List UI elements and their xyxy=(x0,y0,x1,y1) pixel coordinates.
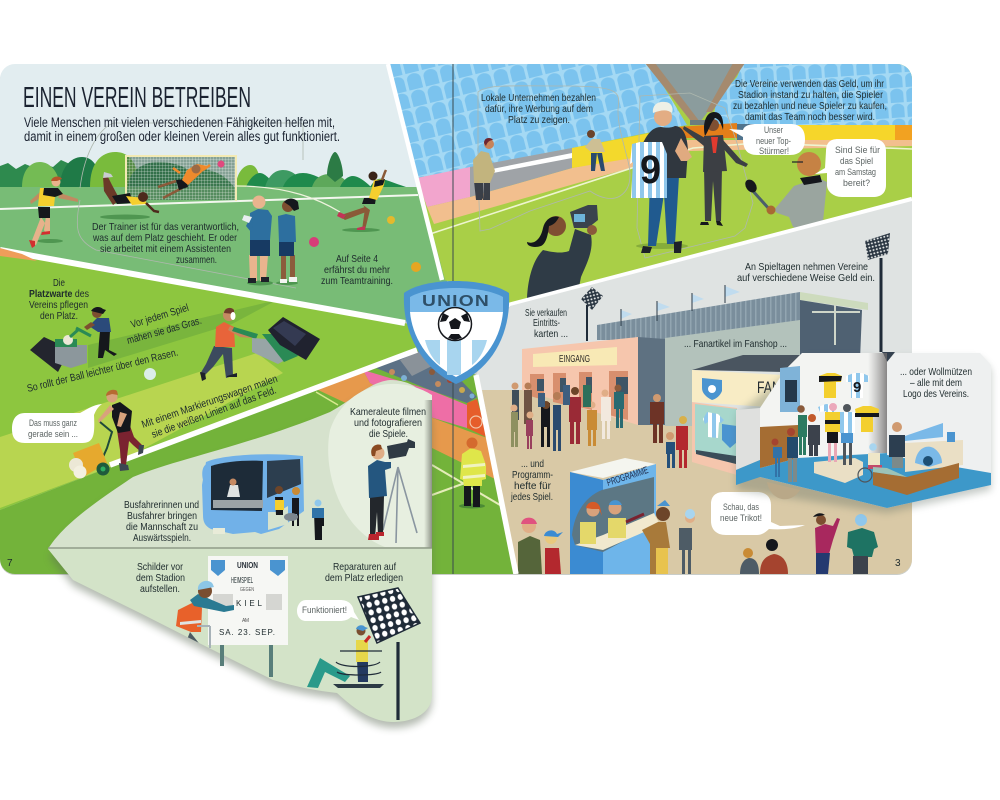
shirts on display xyxy=(818,373,879,432)
beanies text: – alle mit dem xyxy=(910,377,962,389)
fans at kiosk xyxy=(518,500,695,574)
sponsors text: dafür, ihre Werbung auf dem xyxy=(485,103,593,115)
trainer text: Der Trainer ist für das verantwortlich, xyxy=(92,221,239,233)
groundskeepers text xyxy=(29,277,89,322)
interviewer xyxy=(743,152,827,232)
sponsors text xyxy=(481,92,596,126)
income text: An Spieltagen nehmen Vereine xyxy=(745,261,868,273)
match sign: AM xyxy=(242,618,249,624)
fans near the pop-out xyxy=(740,513,878,574)
programme text: Programm- xyxy=(512,469,553,481)
speech bubble: new shirt xyxy=(711,492,805,535)
club crest: UNION xyxy=(422,293,490,310)
marking text: Mit einem Markierungswagen malen xyxy=(140,373,279,431)
bus text: Busfahrerinnen und xyxy=(124,499,199,511)
groundskeepers text: den Platz. xyxy=(40,310,78,322)
track xyxy=(427,140,912,224)
shop floor xyxy=(736,453,991,508)
speech bubble: ready for Saturday: bereit? xyxy=(843,178,870,189)
speech bubble: top striker: neuer Top- xyxy=(756,136,791,147)
match sign xyxy=(208,556,288,677)
tickets text: Sie verkaufen xyxy=(525,307,567,319)
bus text: die Mannschaft zu xyxy=(126,521,198,533)
flap: backstage jobs xyxy=(48,380,432,728)
mannequins and plinth xyxy=(814,403,863,483)
poster xyxy=(780,366,800,412)
trainer text: zusammen. xyxy=(176,254,217,266)
bus text: Busfahrer bringen xyxy=(127,510,197,522)
board worker left xyxy=(473,138,495,200)
fan shop building xyxy=(692,355,800,475)
footballer with new shirt: 9 xyxy=(640,148,661,192)
player kicking xyxy=(309,170,421,272)
vendor right xyxy=(608,500,644,538)
trees behind the pitch xyxy=(0,152,406,187)
intro text: damit in einem großen oder kleinen Verein alles gut funktioniert. xyxy=(24,129,340,144)
floodlight repair xyxy=(307,588,420,720)
panel: match-day income xyxy=(476,201,912,574)
groundskeepers text: Die xyxy=(53,277,65,289)
intro text: Viele Menschen mit vielen verschiedenen Fähigkeiten helfen mit, xyxy=(24,115,335,130)
programme kiosk xyxy=(570,458,660,574)
presenter xyxy=(683,112,748,226)
repairs text: Reparaturen auf xyxy=(333,561,396,573)
vendor left xyxy=(580,502,602,544)
fan shop building: FANS xyxy=(757,378,789,397)
speech bubble: top striker: Stürmer! xyxy=(759,146,789,157)
clubs spend text: Stadion instand zu halten, die Spieler xyxy=(738,89,883,101)
wall text fanshop: ... Fanartikel im Fanshop ... xyxy=(684,338,787,350)
pop-out: fan shop interior xyxy=(736,352,991,513)
floodlight right xyxy=(865,233,890,352)
speech bubble: new shirt: neue Trikot! xyxy=(720,513,762,524)
mowing text xyxy=(26,302,203,395)
family at fan shop xyxy=(666,416,688,468)
mowing text: So rollt der Ball leichter über den Rasen. xyxy=(26,347,179,395)
die-cut outline player xyxy=(637,93,753,258)
floodlight near entrance xyxy=(581,287,603,341)
wheelchair visitor xyxy=(858,443,882,482)
beanies text: ... oder Wollmützen xyxy=(900,366,972,378)
speech bubble: gerade: gerade sein ... xyxy=(28,429,78,440)
repairs text: dem Platz erledigen xyxy=(325,572,403,584)
cameraman with tripod xyxy=(368,439,417,543)
page number right: 3 xyxy=(895,558,901,569)
coach with clipboard xyxy=(242,196,273,286)
teamtraining note: zum Teamtraining. xyxy=(321,275,393,287)
sponsors text: Lokale Unternehmen bezahlen xyxy=(481,92,596,104)
programme text xyxy=(510,458,553,503)
groundskeepers text: Vereins pflegen xyxy=(29,299,88,311)
boarding players xyxy=(275,486,324,540)
panel: press and sponsors xyxy=(388,63,912,306)
speech bubble: ready for Saturday xyxy=(815,139,886,197)
stadium glimpse behind flap xyxy=(0,346,517,574)
cameraman text: Kameraleute filmen xyxy=(350,406,426,418)
groundskeepers text: Platzwarte des xyxy=(29,288,89,300)
tickets text: Eintritts- xyxy=(533,317,560,329)
bus text: Auswärtsspieln. xyxy=(133,532,191,544)
tickets text xyxy=(525,307,568,340)
match sign: SA. 23. SEP. xyxy=(219,628,275,637)
entrance building: EINGANG xyxy=(559,354,590,365)
match sign: UNION xyxy=(237,561,258,570)
programme text: ... und xyxy=(521,458,544,470)
sponsors text: Platz zu zeigen. xyxy=(508,114,570,126)
teamtraining note xyxy=(321,253,393,287)
signs text: dem Stadion xyxy=(136,572,185,584)
steward xyxy=(459,438,486,508)
sales counter xyxy=(760,425,798,468)
speech bubble: ready for Saturday: Sind Sie für xyxy=(835,145,880,156)
beanies text xyxy=(900,366,972,400)
footballer with new shirt xyxy=(630,102,692,253)
match sign: GEGEN xyxy=(240,587,254,593)
signs text: Schilder vor xyxy=(137,561,183,573)
speech bubble: works xyxy=(297,600,359,621)
white line of the pitch xyxy=(110,350,417,465)
assistant coach xyxy=(276,199,299,285)
intro text xyxy=(24,115,340,144)
mowing text: mähen sie das Gras. xyxy=(126,315,203,347)
trainer text: was auf dem Platz geschieht. Er oder xyxy=(92,232,237,244)
panel: training on the pitch xyxy=(0,64,455,330)
income text: auf verschiedene Weise Geld ein. xyxy=(737,272,875,284)
trainer text xyxy=(92,222,238,263)
speech bubble: top striker: Unser xyxy=(764,125,783,136)
programme text: jedes Spiel. xyxy=(510,491,553,503)
diving player xyxy=(100,172,159,220)
income text xyxy=(737,261,875,284)
cameraman text: die Spiele. xyxy=(369,428,408,440)
clubs spend text: damit das Team noch besser wird. xyxy=(745,111,875,123)
speech bubble: ready for Saturday: am Samstag xyxy=(835,167,876,178)
camera operator xyxy=(527,205,598,298)
teamtraining note: Auf Seite 4 xyxy=(336,253,378,265)
die-cut outline sponsors xyxy=(478,86,630,231)
entrance building xyxy=(522,337,665,425)
speech bubble: new shirt: Schau, das xyxy=(723,502,759,513)
board worker right xyxy=(585,130,605,171)
cameraman text: und fotografieren xyxy=(354,417,422,429)
book spine xyxy=(452,64,454,574)
signs text: aufstellen. xyxy=(140,583,180,595)
mower man xyxy=(200,308,320,381)
shirts on display: 9 xyxy=(853,379,861,396)
marking text: sie die weißen Linien auf das Feld. xyxy=(150,384,278,441)
panel: groundskeepers xyxy=(0,248,517,574)
boundary lines xyxy=(388,64,442,280)
shoppers xyxy=(772,405,820,482)
signs text xyxy=(136,561,185,595)
speech bubble: gerade: Das muss ganz xyxy=(29,418,77,429)
trainer text: sie arbeitet mit einem Assistenten xyxy=(100,243,231,255)
open book spread xyxy=(0,63,912,575)
die-cut notch under pop-out xyxy=(767,482,800,499)
programme text: hefte für xyxy=(514,480,551,492)
line marker man xyxy=(69,390,144,478)
ball on the grass xyxy=(144,368,156,380)
match sign: KIEL xyxy=(236,599,263,608)
touchline xyxy=(0,195,418,209)
repairs text xyxy=(325,561,403,584)
flags xyxy=(621,285,740,327)
goal xyxy=(126,156,340,212)
die-cut outline goal xyxy=(77,123,303,288)
teamtraining note: erfährst du mehr xyxy=(324,264,390,276)
mower woman xyxy=(30,307,117,372)
speech bubble: ready for Saturday: das Spiel xyxy=(840,156,873,167)
match sign: HEIMSPIEL xyxy=(231,576,253,585)
goalkeeper xyxy=(158,160,224,198)
grandstand xyxy=(597,292,868,426)
sign installer xyxy=(176,581,234,654)
cameraman text xyxy=(350,406,426,440)
shop assistant xyxy=(889,422,905,468)
title: EINEN VEREIN BETREIBEN xyxy=(23,82,251,114)
clubs spend text: Die Vereine verwenden das Geld, um ihr xyxy=(735,78,884,90)
beanies text: Logo des Vereins. xyxy=(903,388,969,400)
queue at entrance xyxy=(510,382,664,451)
clubs spend text: zu bezahlen und neue Spieler zu kaufen, xyxy=(733,100,887,112)
team bus xyxy=(202,454,304,534)
speech bubble: top striker xyxy=(729,124,805,157)
player running left xyxy=(29,177,78,248)
tickets text: karten ... xyxy=(534,328,568,340)
clubs spend text xyxy=(733,78,887,123)
speech bubble: gerade xyxy=(12,404,102,443)
bus text xyxy=(124,499,199,544)
speech bubble: works: Funktioniert! xyxy=(302,605,347,616)
mowing text: Vor jedem Spiel xyxy=(129,302,190,331)
programme kiosk: PROGRAMME xyxy=(606,465,650,489)
club crest xyxy=(404,281,509,384)
beanie table xyxy=(873,423,963,495)
page number left: 7 xyxy=(7,558,13,569)
advertising hoardings xyxy=(417,123,912,207)
